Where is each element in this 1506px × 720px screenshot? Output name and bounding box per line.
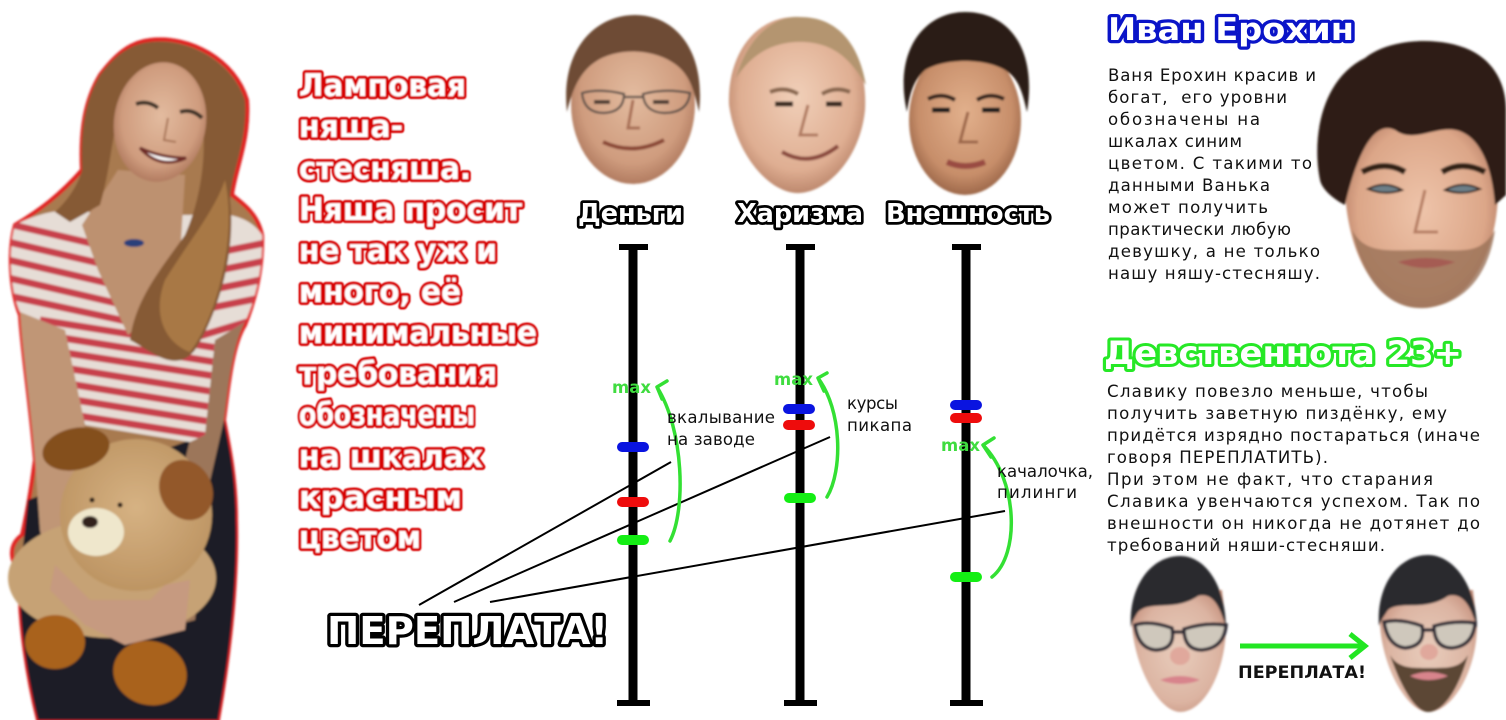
description text: няша-стесняша: требования — [299, 356, 497, 392]
overpay caption: ПЕРЕПЛАТА! — [1238, 663, 1366, 683]
heading: Virgin: Девственнота 23+ — [1104, 334, 1462, 372]
teddy foot right — [106, 633, 194, 713]
column headings — [578, 199, 1050, 229]
column headings: Харизма — [737, 199, 863, 229]
description text: няша-стесняша: Ламповая — [299, 68, 466, 104]
red marker — [622, 497, 644, 507]
green marker — [622, 535, 644, 545]
red glow outline — [11, 39, 262, 720]
face: looks — [904, 12, 1029, 195]
text: Slavik description: внешности он никогда не дотянет до — [1107, 514, 1480, 533]
hair — [55, 42, 245, 361]
left arm — [20, 310, 120, 625]
text: Slavik description: Славику повезло меньше, чтобы — [1107, 382, 1428, 401]
max labels: max — [774, 370, 813, 389]
text: Slavik description: говоря ПЕРЕПЛАТИТЬ). — [1107, 448, 1328, 467]
teddy body — [8, 518, 216, 638]
description text: няша-стесняша: на шкалах — [299, 439, 483, 475]
text: Slavik description: получить заветную пиздёнку, ему — [1107, 404, 1447, 423]
text: Ivan description: девушку, а не только — [1108, 242, 1320, 261]
scale: looks — [950, 247, 983, 703]
teddy head — [60, 439, 212, 591]
description text: няша-стесняша: стесняша. — [299, 151, 471, 187]
text: Slavik description: требований няши-стесняши. — [1107, 536, 1385, 555]
text: Ivan description: шкалах синим — [1108, 132, 1242, 151]
arrow: charisma to max — [818, 373, 838, 497]
description text: няша-стесняша: красным — [299, 480, 462, 516]
overpay heading: ПЕРЕПЛАТА! — [327, 609, 608, 653]
effort labels: курсы — [847, 394, 898, 413]
green marker — [955, 572, 977, 582]
face: Ivan — [1317, 41, 1506, 308]
green marker — [789, 493, 811, 503]
right arm — [110, 320, 246, 640]
arrow: overpay — [1240, 634, 1365, 658]
text: Ivan description: Ваня Ерохин красив и — [1108, 66, 1316, 85]
description text: няша-стесняша: минимальные — [299, 315, 537, 351]
text: Ivan description — [1108, 66, 1320, 283]
max labels: max — [941, 436, 980, 455]
teddy snout — [68, 508, 124, 556]
description text: няша-стесняша: цветом — [299, 520, 421, 556]
description text: няша-стесняша: Няша просит — [299, 192, 522, 228]
text: Ivan description: практически любую — [1108, 220, 1291, 239]
text: Ivan description: богат, его уровни — [1108, 88, 1287, 107]
face: Slavik after — [1379, 555, 1477, 712]
teddy ear left — [38, 421, 114, 477]
text: Slavik description — [1107, 382, 1480, 555]
necklace — [124, 239, 144, 247]
red marker — [788, 420, 810, 430]
face: charisma — [729, 17, 866, 193]
face: money — [566, 15, 700, 184]
teddy ear right — [149, 451, 223, 529]
effort labels: на заводе — [667, 430, 755, 449]
effort labels: пикапа — [847, 416, 912, 435]
hands — [50, 565, 190, 645]
photo: girl with teddy bear — [0, 39, 280, 720]
eyes — [136, 103, 202, 118]
teddy nose — [82, 516, 98, 528]
description text: няша-стесняша: много, её — [299, 274, 461, 310]
text: Slavik description: При этом не факт, что старания — [1107, 470, 1433, 489]
max labels: max — [612, 378, 651, 397]
text: Ivan description: нашу няшу-стесняшу. — [1108, 264, 1320, 283]
scale: charisma — [784, 247, 817, 703]
smile — [140, 148, 186, 162]
blue marker — [788, 404, 810, 414]
dark skirt — [20, 420, 236, 720]
description text: няша-стесняша — [299, 68, 537, 556]
heading: Ivan: Иван Ерохин — [1108, 12, 1354, 48]
face: Slavik before — [1131, 556, 1226, 712]
blue marker — [622, 442, 644, 452]
column headings: Деньги — [578, 199, 683, 229]
effort labels — [667, 394, 1093, 502]
max labels — [612, 370, 980, 455]
blue marker — [955, 400, 977, 410]
hair highlight — [160, 180, 229, 352]
striped shirt — [8, 210, 264, 444]
nose — [164, 118, 176, 142]
arrow: looks to max — [983, 438, 1011, 577]
effort labels: вкалывание — [667, 408, 775, 427]
teddy eyes — [92, 500, 120, 505]
text: Ivan description: может получить — [1108, 198, 1268, 217]
effort labels: качалочка, — [997, 462, 1093, 481]
teddy foot left — [25, 615, 85, 669]
text: Slavik description: придётся изрядно постараться (иначе — [1107, 426, 1480, 445]
description text: няша-стесняша: няша- — [299, 109, 403, 145]
red marker — [955, 413, 977, 423]
face — [106, 56, 214, 188]
scale: money — [617, 247, 650, 703]
text: Ivan description: цветом. С такими то — [1108, 154, 1312, 173]
description text: няша-стесняша: обозначены — [299, 397, 475, 433]
overpay lines — [419, 437, 1005, 605]
description text: няша-стесняша: не так уж и — [299, 233, 497, 269]
neck and chest — [82, 170, 185, 335]
arrow: money to max — [657, 381, 680, 541]
column headings: Внешность — [886, 199, 1050, 229]
text: Slavik description: Славика увенчаются успехом. Так по — [1107, 492, 1480, 511]
effort labels: пилинги — [997, 483, 1077, 502]
text: Ivan description: обозначены на — [1108, 110, 1260, 129]
text: Ivan description: данными Ванька — [1108, 176, 1270, 195]
